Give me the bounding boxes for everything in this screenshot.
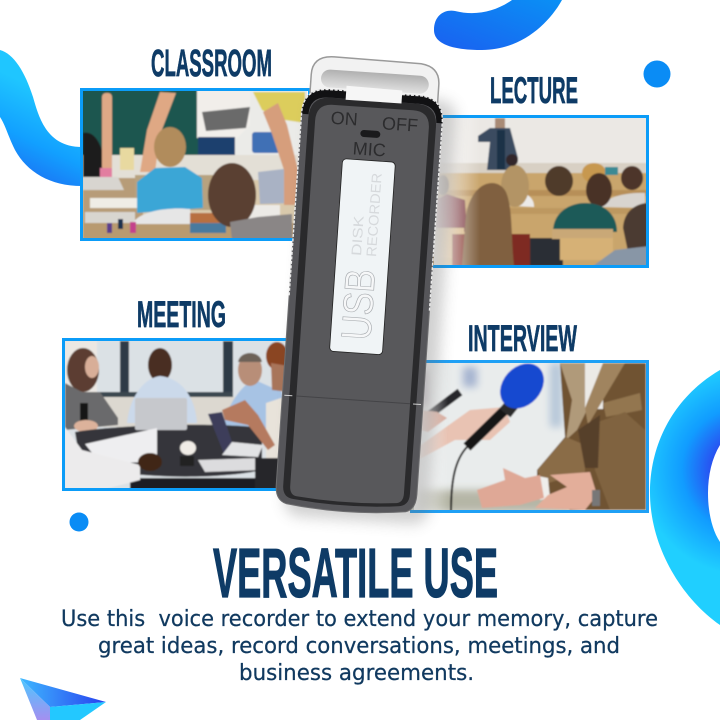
panel: lecture: [430, 70, 650, 270]
label: DISK RECORDER: DISK: [348, 215, 367, 256]
seam: [284, 395, 421, 405]
label: OFF: OFF: [381, 113, 419, 136]
label: MIC: MIC: [352, 138, 386, 161]
description text: great ideas, record conversations, meetings, and: [98, 633, 620, 659]
decorative wave: top left: [0, 50, 82, 186]
panel: classroom: [80, 43, 310, 243]
panel: classroom: CLASSROOM: [151, 43, 272, 85]
heading: interview: INTERVIEW: [468, 318, 577, 359]
panel: meeting: [60, 294, 292, 493]
frame: lecture: [430, 116, 648, 266]
description text: Use this voice recorder to extend your memory, capture: [61, 606, 658, 632]
description text: [61, 606, 658, 686]
mic slot: [360, 130, 381, 138]
outer body: [275, 88, 444, 516]
inner panel: [289, 104, 430, 506]
label: DISK RECORDER: [348, 171, 385, 257]
decorative triangle: bottom left: [20, 678, 106, 720]
clip slot: [320, 69, 429, 94]
inner dark stripe: [282, 96, 437, 510]
label window: [329, 159, 395, 355]
shadow beside recorder: [434, 118, 480, 265]
photo: meeting: [60, 338, 292, 493]
photo: classroom: [80, 88, 310, 243]
device: USB voice recorder: [274, 55, 459, 525]
description text: business agreements.: [239, 660, 474, 686]
label: USB: USB: [332, 268, 384, 342]
label: ON: ON: [330, 108, 358, 130]
soft shadow: [283, 91, 457, 525]
panel: interview: [410, 318, 650, 515]
decorative crescent: top: [434, 0, 562, 50]
decorative crescent: right: [650, 370, 720, 625]
photo: interview: [411, 363, 646, 510]
decorative dot: lower left: [70, 512, 88, 532]
connector tab: [346, 86, 402, 104]
frame: meeting: [64, 340, 290, 490]
clip loop: [310, 55, 440, 105]
heading: lecture: LECTURE: [490, 70, 578, 111]
frame: classroom: [82, 90, 310, 240]
photo: lecture: [430, 115, 650, 270]
label: DISK RECORDER: RECORDER: [363, 172, 385, 257]
silver edge: [289, 88, 444, 311]
decorative dot: top right: [644, 60, 670, 88]
shadow beside recorder, lower: [414, 363, 448, 510]
frame: interview: [410, 362, 648, 512]
heading: meeting: MEETING: [137, 294, 226, 335]
top rim: [302, 88, 444, 123]
